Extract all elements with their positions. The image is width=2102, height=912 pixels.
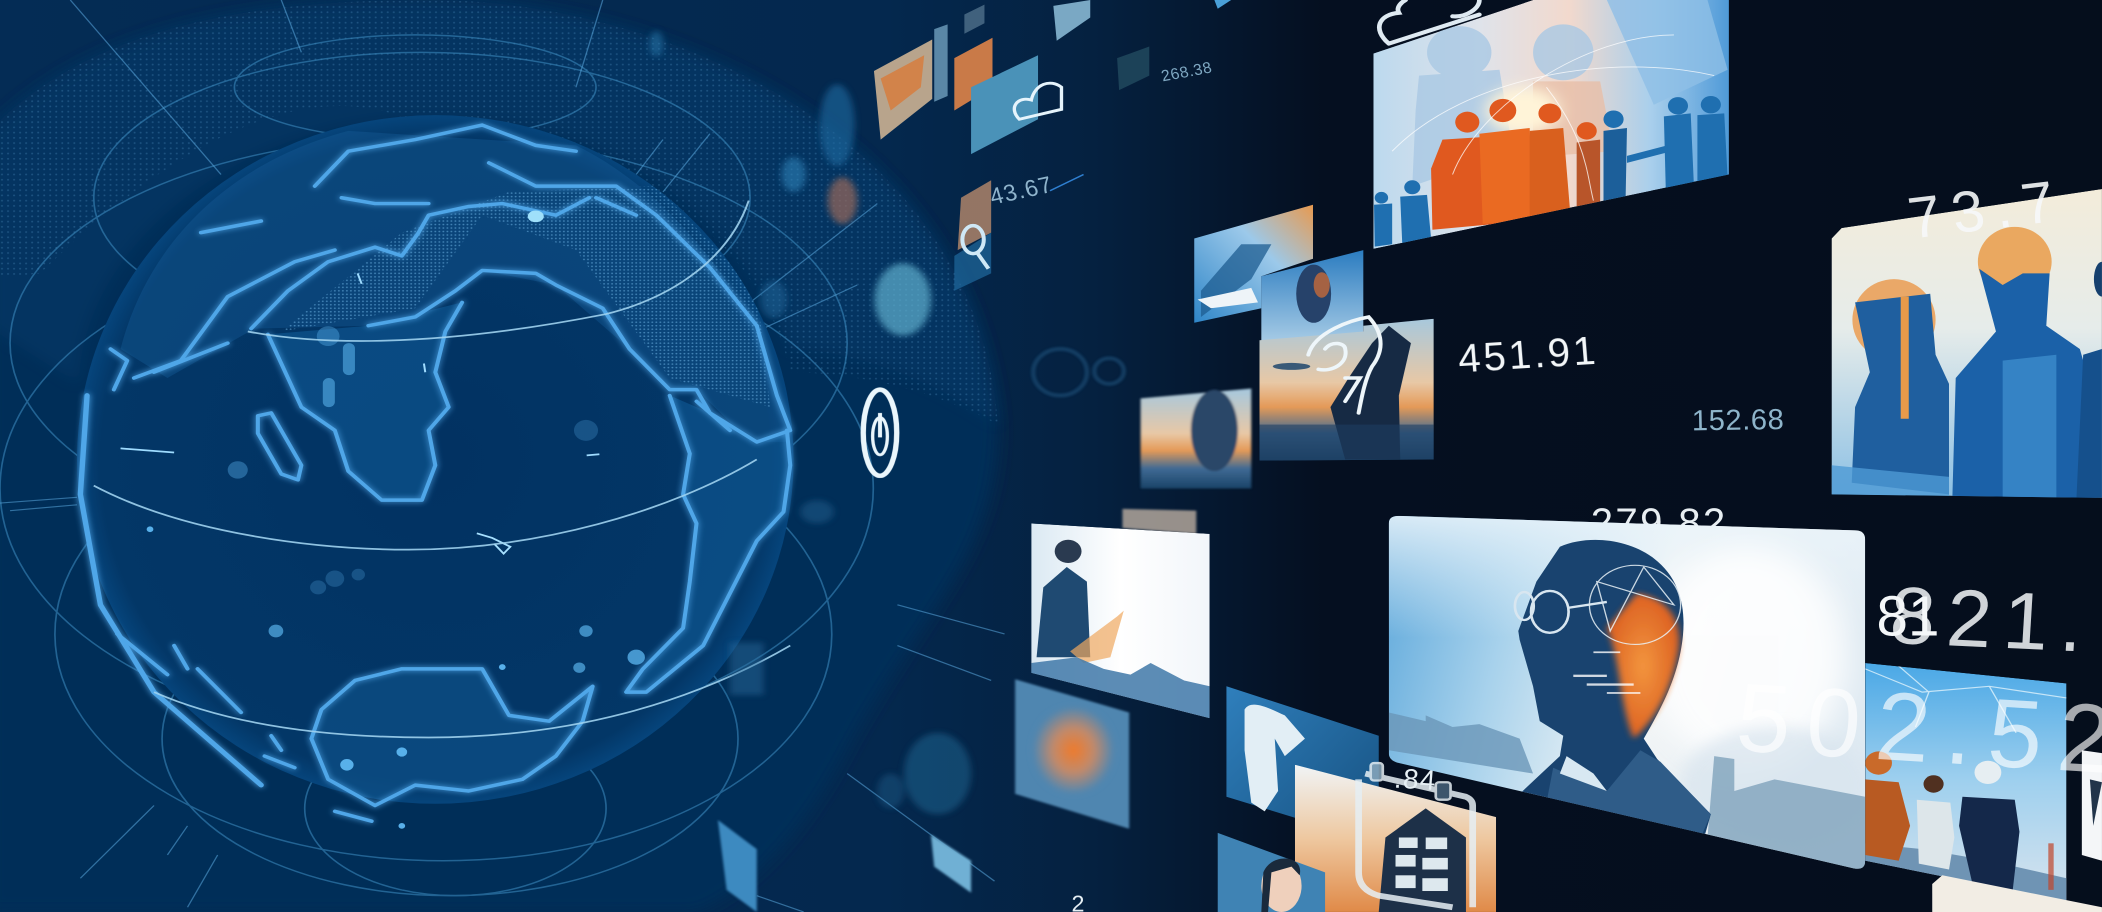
icon: calendar	[1359, 763, 1473, 907]
number: 268.38: 268.38	[1160, 59, 1214, 85]
photo: head and skyline	[1385, 512, 1868, 872]
number: 279.82: 279.82	[1591, 500, 1728, 545]
orbit rings behind	[0, 35, 873, 896]
photo: car and hand	[1194, 205, 1313, 323]
outer dotted sphere	[0, 0, 998, 912]
number: 81: 81	[1877, 585, 1939, 648]
left figure	[1852, 279, 1936, 349]
panel: media wall	[1015, 0, 2102, 912]
number: 43.67: 43.67	[987, 171, 1056, 210]
globe sphere	[77, 115, 794, 829]
number: 821: 821.	[1888, 571, 2097, 670]
tiles at upper left	[1050, 0, 1231, 191]
small island chain	[477, 533, 510, 554]
photo: blurred tile behind	[1122, 509, 1196, 534]
orange group	[1431, 99, 1600, 230]
icon: cloud outline	[1379, 0, 1479, 44]
number: 451.91: 451.91	[1456, 328, 1600, 381]
geometric head overlay	[1589, 565, 1681, 644]
icon: search	[962, 226, 988, 269]
photo: profile skyline	[1261, 250, 1363, 343]
icon: brain circuit	[1308, 317, 1381, 413]
icon: cloud	[1014, 83, 1061, 119]
photo: robot arm	[1226, 686, 1379, 843]
photo: orange blur	[1015, 679, 1129, 829]
photo: beige team silhouettes	[1832, 189, 2102, 498]
photo: presenter	[1031, 523, 1210, 718]
person middle	[1924, 775, 1944, 793]
photo: blurred sunset figure	[1141, 389, 1251, 489]
photo: white tile right	[2082, 750, 2102, 861]
head	[1518, 540, 1711, 838]
glasses	[1515, 591, 1607, 633]
radial light streaks	[0, 0, 1005, 912]
blue silhouettes	[1374, 96, 1728, 247]
photo: person at sunset	[1259, 317, 1435, 462]
person right	[1975, 761, 2001, 784]
faded silhouettes	[1412, 0, 1728, 186]
photo: woman portrait	[1218, 833, 1325, 912]
right figure	[2076, 349, 2102, 498]
network arcs	[1392, 35, 1714, 201]
number: 152.68: 152.68	[1692, 404, 1785, 437]
center figure	[1978, 226, 2052, 285]
number: .84: .84	[1393, 763, 1438, 796]
photo: people looking out	[1865, 663, 2066, 901]
continent outlines	[80, 125, 790, 821]
city	[1389, 712, 1533, 774]
photo: business team	[1373, 0, 1729, 249]
blurred distant tiles	[650, 31, 971, 814]
panel: globe visual	[0, 0, 1061, 912]
photo: white corner bottom	[1932, 875, 2102, 912]
bright front ring arcs	[94, 201, 790, 737]
person left	[1865, 751, 1892, 775]
number: 73.7: 73.7	[1904, 168, 2070, 251]
land dot texture	[121, 131, 790, 806]
photo: sunset jacket	[1295, 765, 1496, 912]
scattered dots on globe	[147, 211, 645, 829]
short light dashes	[121, 273, 599, 455]
icon: power button	[863, 390, 897, 476]
small media tiles near globe	[718, 5, 1038, 912]
blurred icons at far left	[1033, 349, 1124, 395]
data specks	[1573, 651, 1640, 694]
